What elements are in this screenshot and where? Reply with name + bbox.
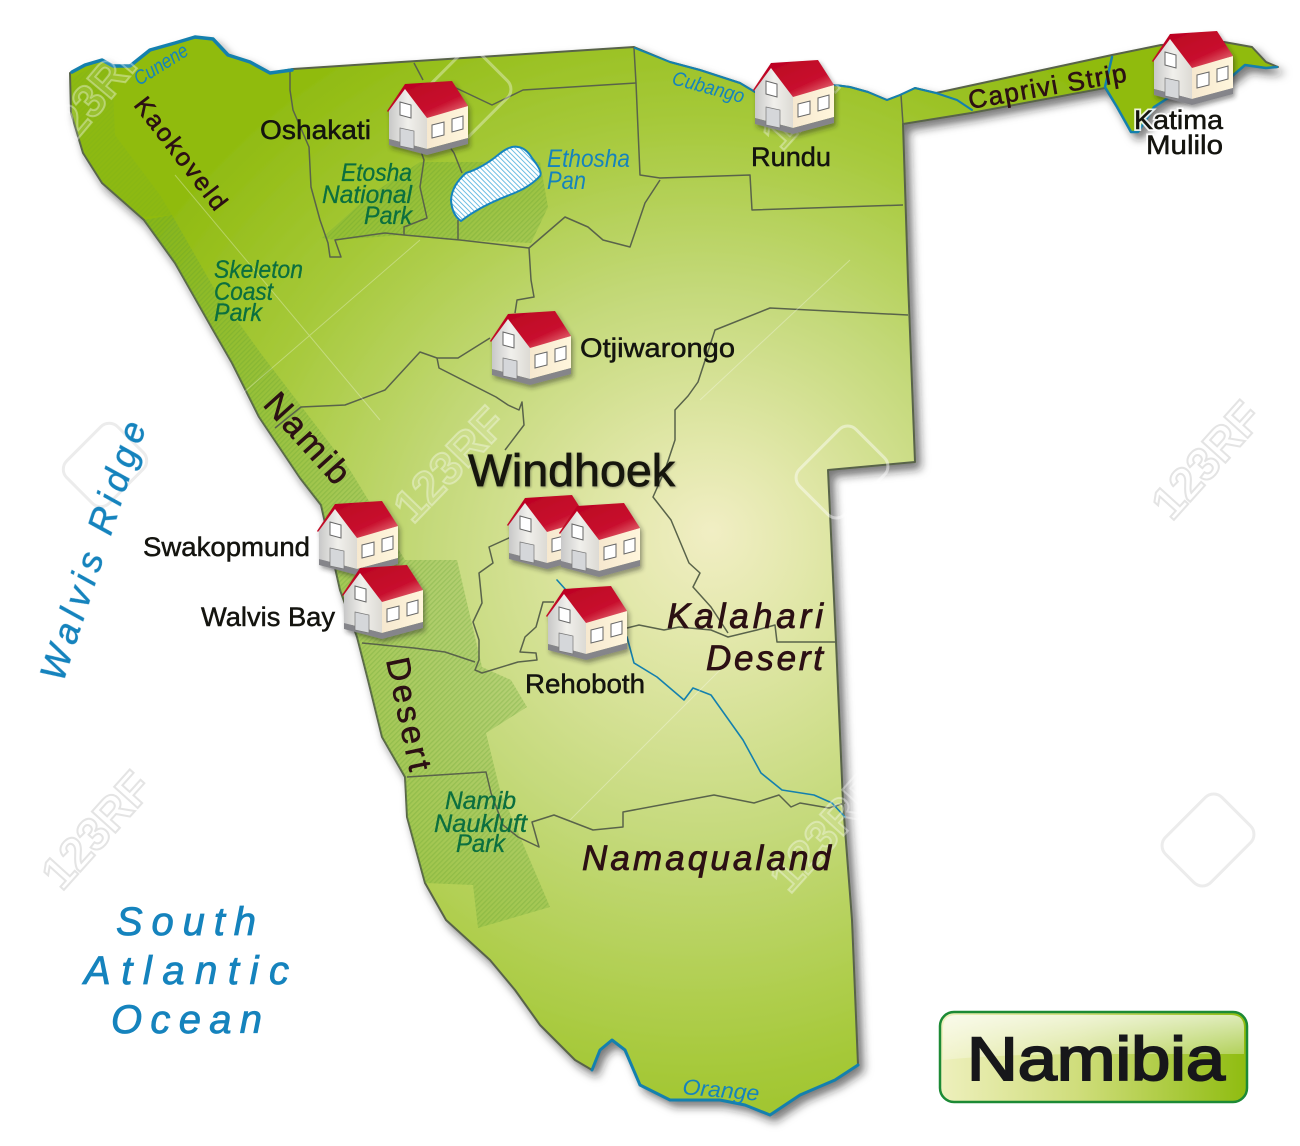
label: Oshakati: Oshakati (260, 115, 371, 145)
label: Skeleton Coast Park: Skeleton (214, 256, 303, 284)
label: Ethosha Pan (547, 145, 630, 195)
label: Namib Naukluft Park: Namib (445, 787, 516, 815)
hatched coastal park band (144, 215, 550, 928)
river: Cunene (72, 37, 292, 73)
river: Orange (592, 1040, 858, 1115)
house: Katima Mulilo (1152, 31, 1233, 105)
label: Katima Mulilo: Katima (1134, 105, 1224, 135)
label: Namaqualand: Namaqualand (582, 839, 833, 878)
label: Namib Naukluft Park: Naukluft (434, 810, 528, 838)
label: Skeleton Coast Park: Coast (214, 278, 274, 306)
label: Ethosha Pan: Ethosha (547, 145, 630, 173)
label: Etosha National Park: Park (364, 202, 413, 230)
label: Walvis Ridge: Walvis Ridge (32, 416, 154, 685)
label: Cubango: Cubango (670, 68, 747, 108)
label: South Atlantic Ocean: Ocean (111, 998, 262, 1042)
label: Katima Mulilo: Mulilo (1146, 130, 1223, 160)
house: Swakopmund (317, 501, 398, 575)
label: Katima Mulilo (1134, 105, 1224, 160)
label: South Atlantic Ocean (82, 900, 289, 1042)
label: South Atlantic Ocean: Atlantic (82, 949, 289, 993)
label: Kalahari Desert (667, 597, 824, 678)
regional labels (128, 58, 1129, 878)
label: Namib Naukluft Park (434, 787, 528, 858)
label: Etosha National Park (322, 159, 413, 230)
house: Windhoek right (559, 503, 640, 577)
house: Windhoek left (507, 495, 588, 569)
label: Desert coastal: Desert (379, 654, 439, 774)
label: Skeleton Coast Park (214, 256, 303, 327)
house: Rehoboth (546, 586, 627, 660)
label: South Atlantic Ocean: South (116, 900, 256, 944)
river: Kwando and Zambezi (1105, 57, 1277, 132)
sea watermarks: 123RF (1141, 391, 1272, 529)
river: Cubango and Caprivi (635, 48, 972, 110)
label: Skeleton Coast Park: Park (214, 299, 263, 327)
label: Namib: Namib (256, 385, 358, 492)
map watermarks: 123RF (759, 764, 890, 902)
map watermarks: 123RF (751, 21, 882, 159)
hatched Etosha park (322, 162, 548, 243)
water labels (32, 40, 760, 1106)
label: Windhoek: Windhoek (468, 445, 676, 496)
label: Cunene: Cunene (130, 40, 193, 90)
region borders (275, 48, 908, 847)
label: Swakopmund: Swakopmund (143, 532, 310, 562)
label: Rehoboth: Rehoboth (525, 669, 645, 699)
label: Rundu: Rundu (751, 142, 831, 172)
label: Etosha National Park: Etosha (341, 159, 412, 187)
label: Kalahari Desert: Kalahari (667, 597, 824, 636)
map watermarks: 123RF (28, 27, 156, 166)
label: Etosha National Park: National (322, 181, 413, 209)
label: Kaokoveld: Kaokoveld (128, 92, 233, 216)
title button: Namibia (940, 1012, 1247, 1102)
park labels (214, 159, 528, 858)
label: Katima Mulilo: Katima (1134, 105, 1224, 135)
label: Ethosha Pan: Pan (547, 167, 586, 195)
house: Otjiwarongo (490, 311, 571, 385)
city labels (143, 105, 1224, 699)
houses: city markers (317, 31, 1233, 660)
label: Walvis Bay: Walvis Bay (201, 602, 335, 632)
sea watermarks: 123RF (31, 761, 162, 899)
lake: Etosha Pan (451, 147, 541, 221)
house: Walvis Bay (342, 565, 423, 639)
label: Namib Naukluft Park: Park (456, 830, 506, 858)
map watermarks (28, 21, 893, 902)
label: Kalahari Desert: Desert (706, 639, 824, 678)
hatched coastal park band, northern tip (71, 62, 172, 217)
label: Katima Mulilo: Mulilo (1146, 130, 1223, 160)
sea watermarks (31, 391, 1272, 899)
label: Otjiwarongo: Otjiwarongo (580, 333, 735, 363)
label: Caprivi Strip: Caprivi Strip (966, 58, 1129, 115)
river: Fish River (557, 580, 845, 817)
map watermarks: 123RF (383, 396, 516, 532)
house: Oshakati (387, 81, 468, 155)
label: Orange: Orange (682, 1074, 760, 1106)
title button: Namibia: Namibia (967, 1025, 1225, 1093)
house: Rundu (753, 60, 834, 134)
